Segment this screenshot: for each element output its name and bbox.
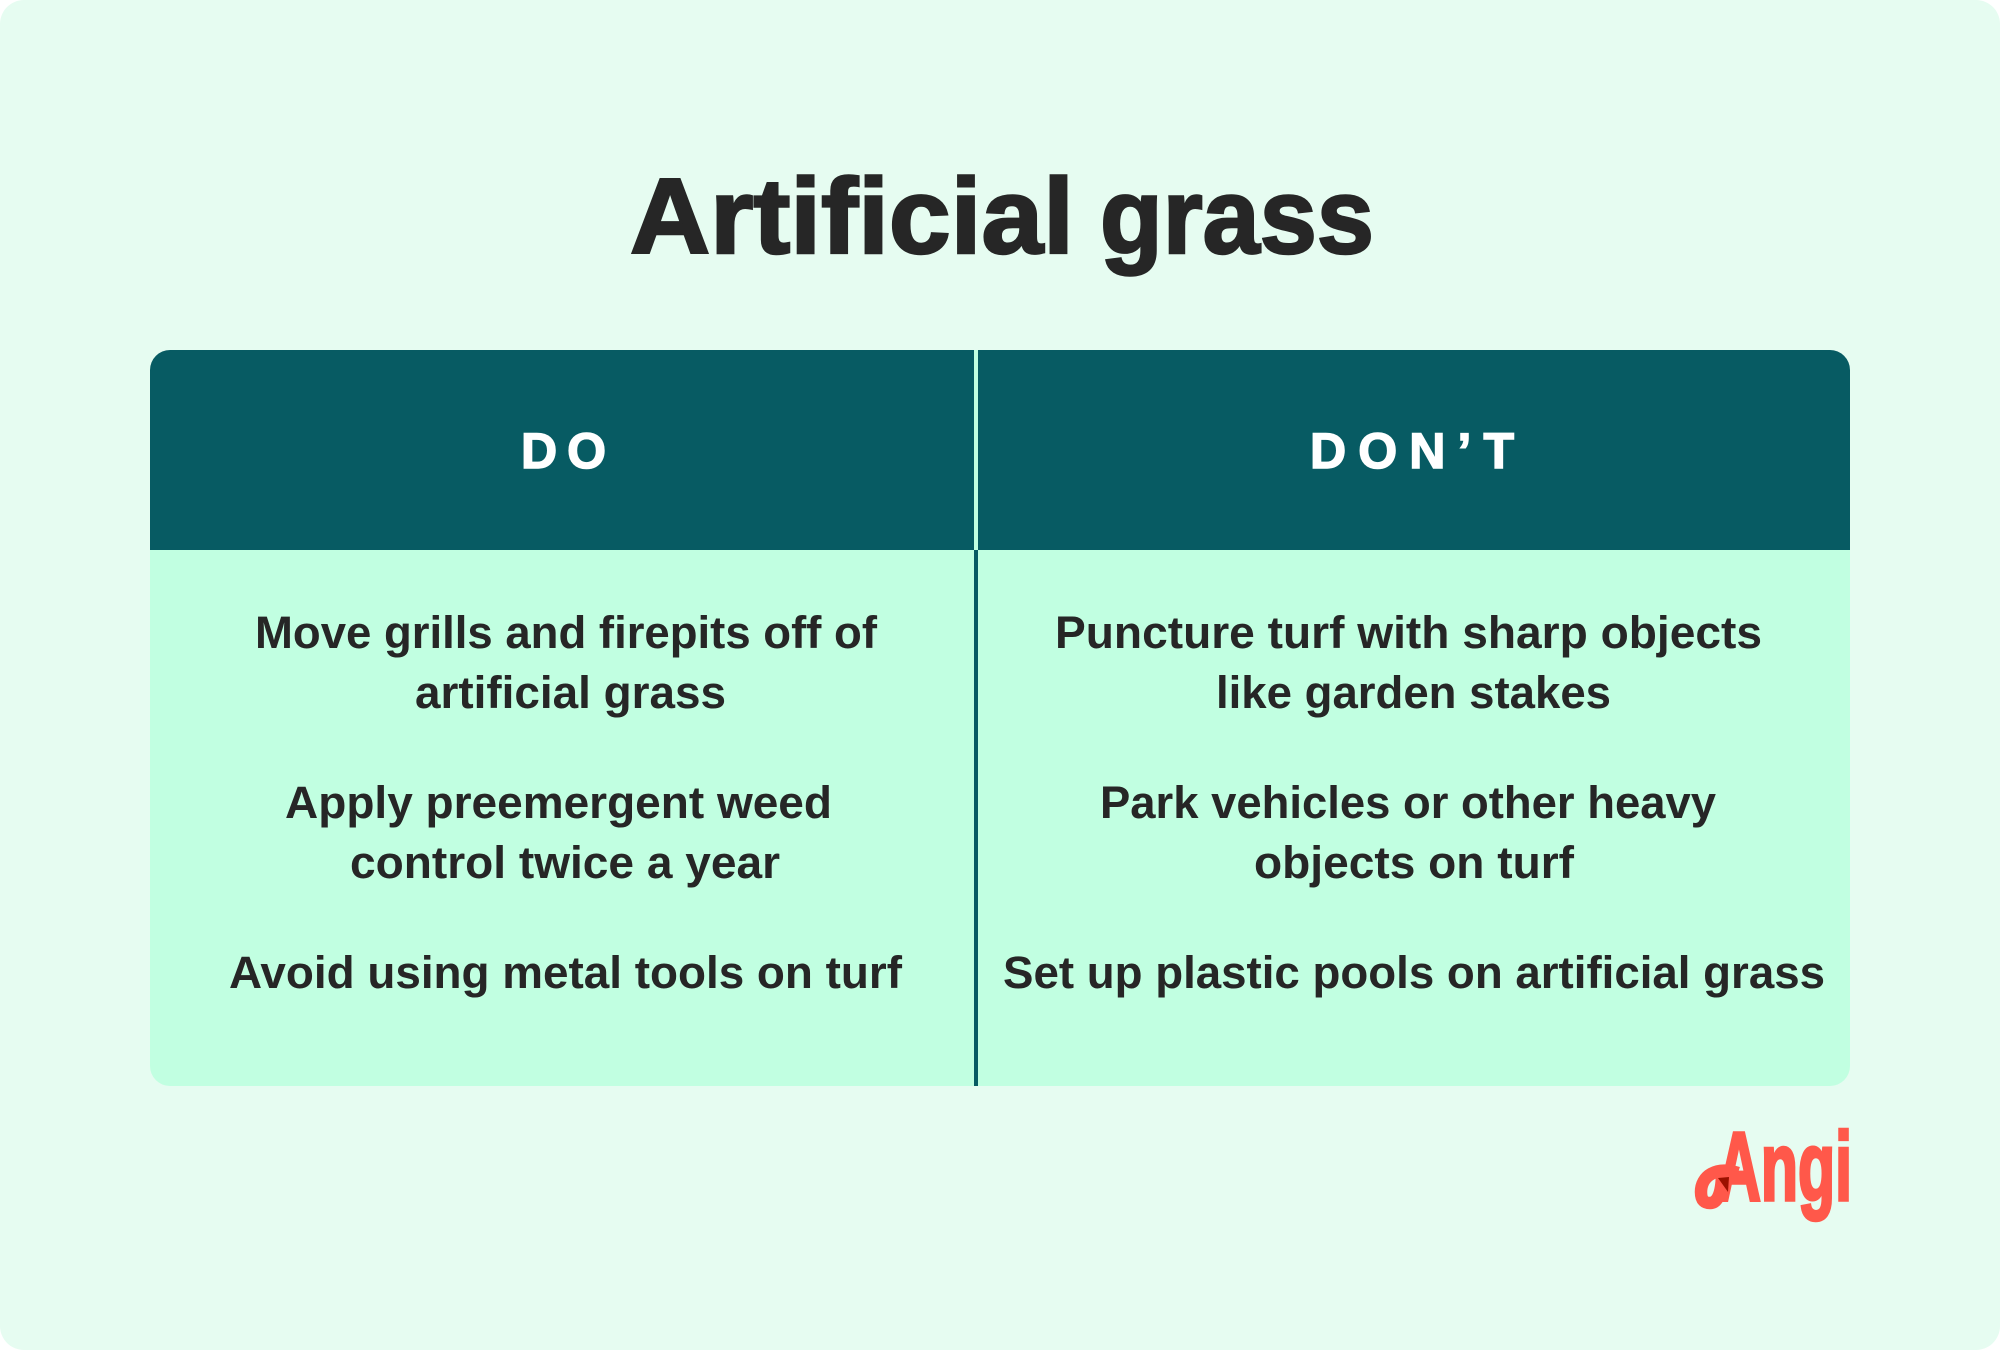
title: Artificial <box>630 156 1074 276</box>
don't item: plastic pools: Set up plastic pools on artificial grass <box>1003 947 1825 998</box>
title <box>630 156 1374 276</box>
do item: grills: Move grills and firepits off of <box>255 607 878 658</box>
body divider <box>974 550 978 1086</box>
logo loop <box>1701 1171 1738 1203</box>
column heading: do: DO <box>521 423 606 479</box>
don't item: puncture: like garden stakes <box>1216 667 1611 718</box>
title: grass <box>1100 156 1374 276</box>
header divider <box>974 350 978 550</box>
don't item: puncture: Puncture turf with sharp objects <box>1055 607 1762 658</box>
don't item: vehicles: Park vehicles or other heavy <box>1100 777 1716 828</box>
do item: weed control: Apply preemergent weed <box>285 777 832 828</box>
don't item: vehicles <box>1100 777 1716 888</box>
table body background <box>150 550 1850 1086</box>
do item: weed control <box>285 777 832 888</box>
table header band <box>150 350 1850 550</box>
table: do and don't <box>150 350 1850 1086</box>
do item: grills: artificial grass <box>415 667 726 718</box>
do item: grills <box>255 607 878 718</box>
column: do items <box>229 607 903 998</box>
icon: Angi logo <box>1701 1112 1852 1221</box>
do item: weed control: control twice a year <box>350 837 780 888</box>
do item: metal tools: Avoid using metal tools on turf <box>229 947 903 998</box>
logo wordmark: Angi <box>1717 1112 1852 1221</box>
don't item: vehicles: objects on turf <box>1254 837 1575 888</box>
column: don't items <box>1003 607 1825 998</box>
column heading: don't: DON’T <box>1310 423 1514 479</box>
don't item: puncture <box>1055 607 1762 718</box>
logo loop shadow <box>1718 1177 1729 1192</box>
